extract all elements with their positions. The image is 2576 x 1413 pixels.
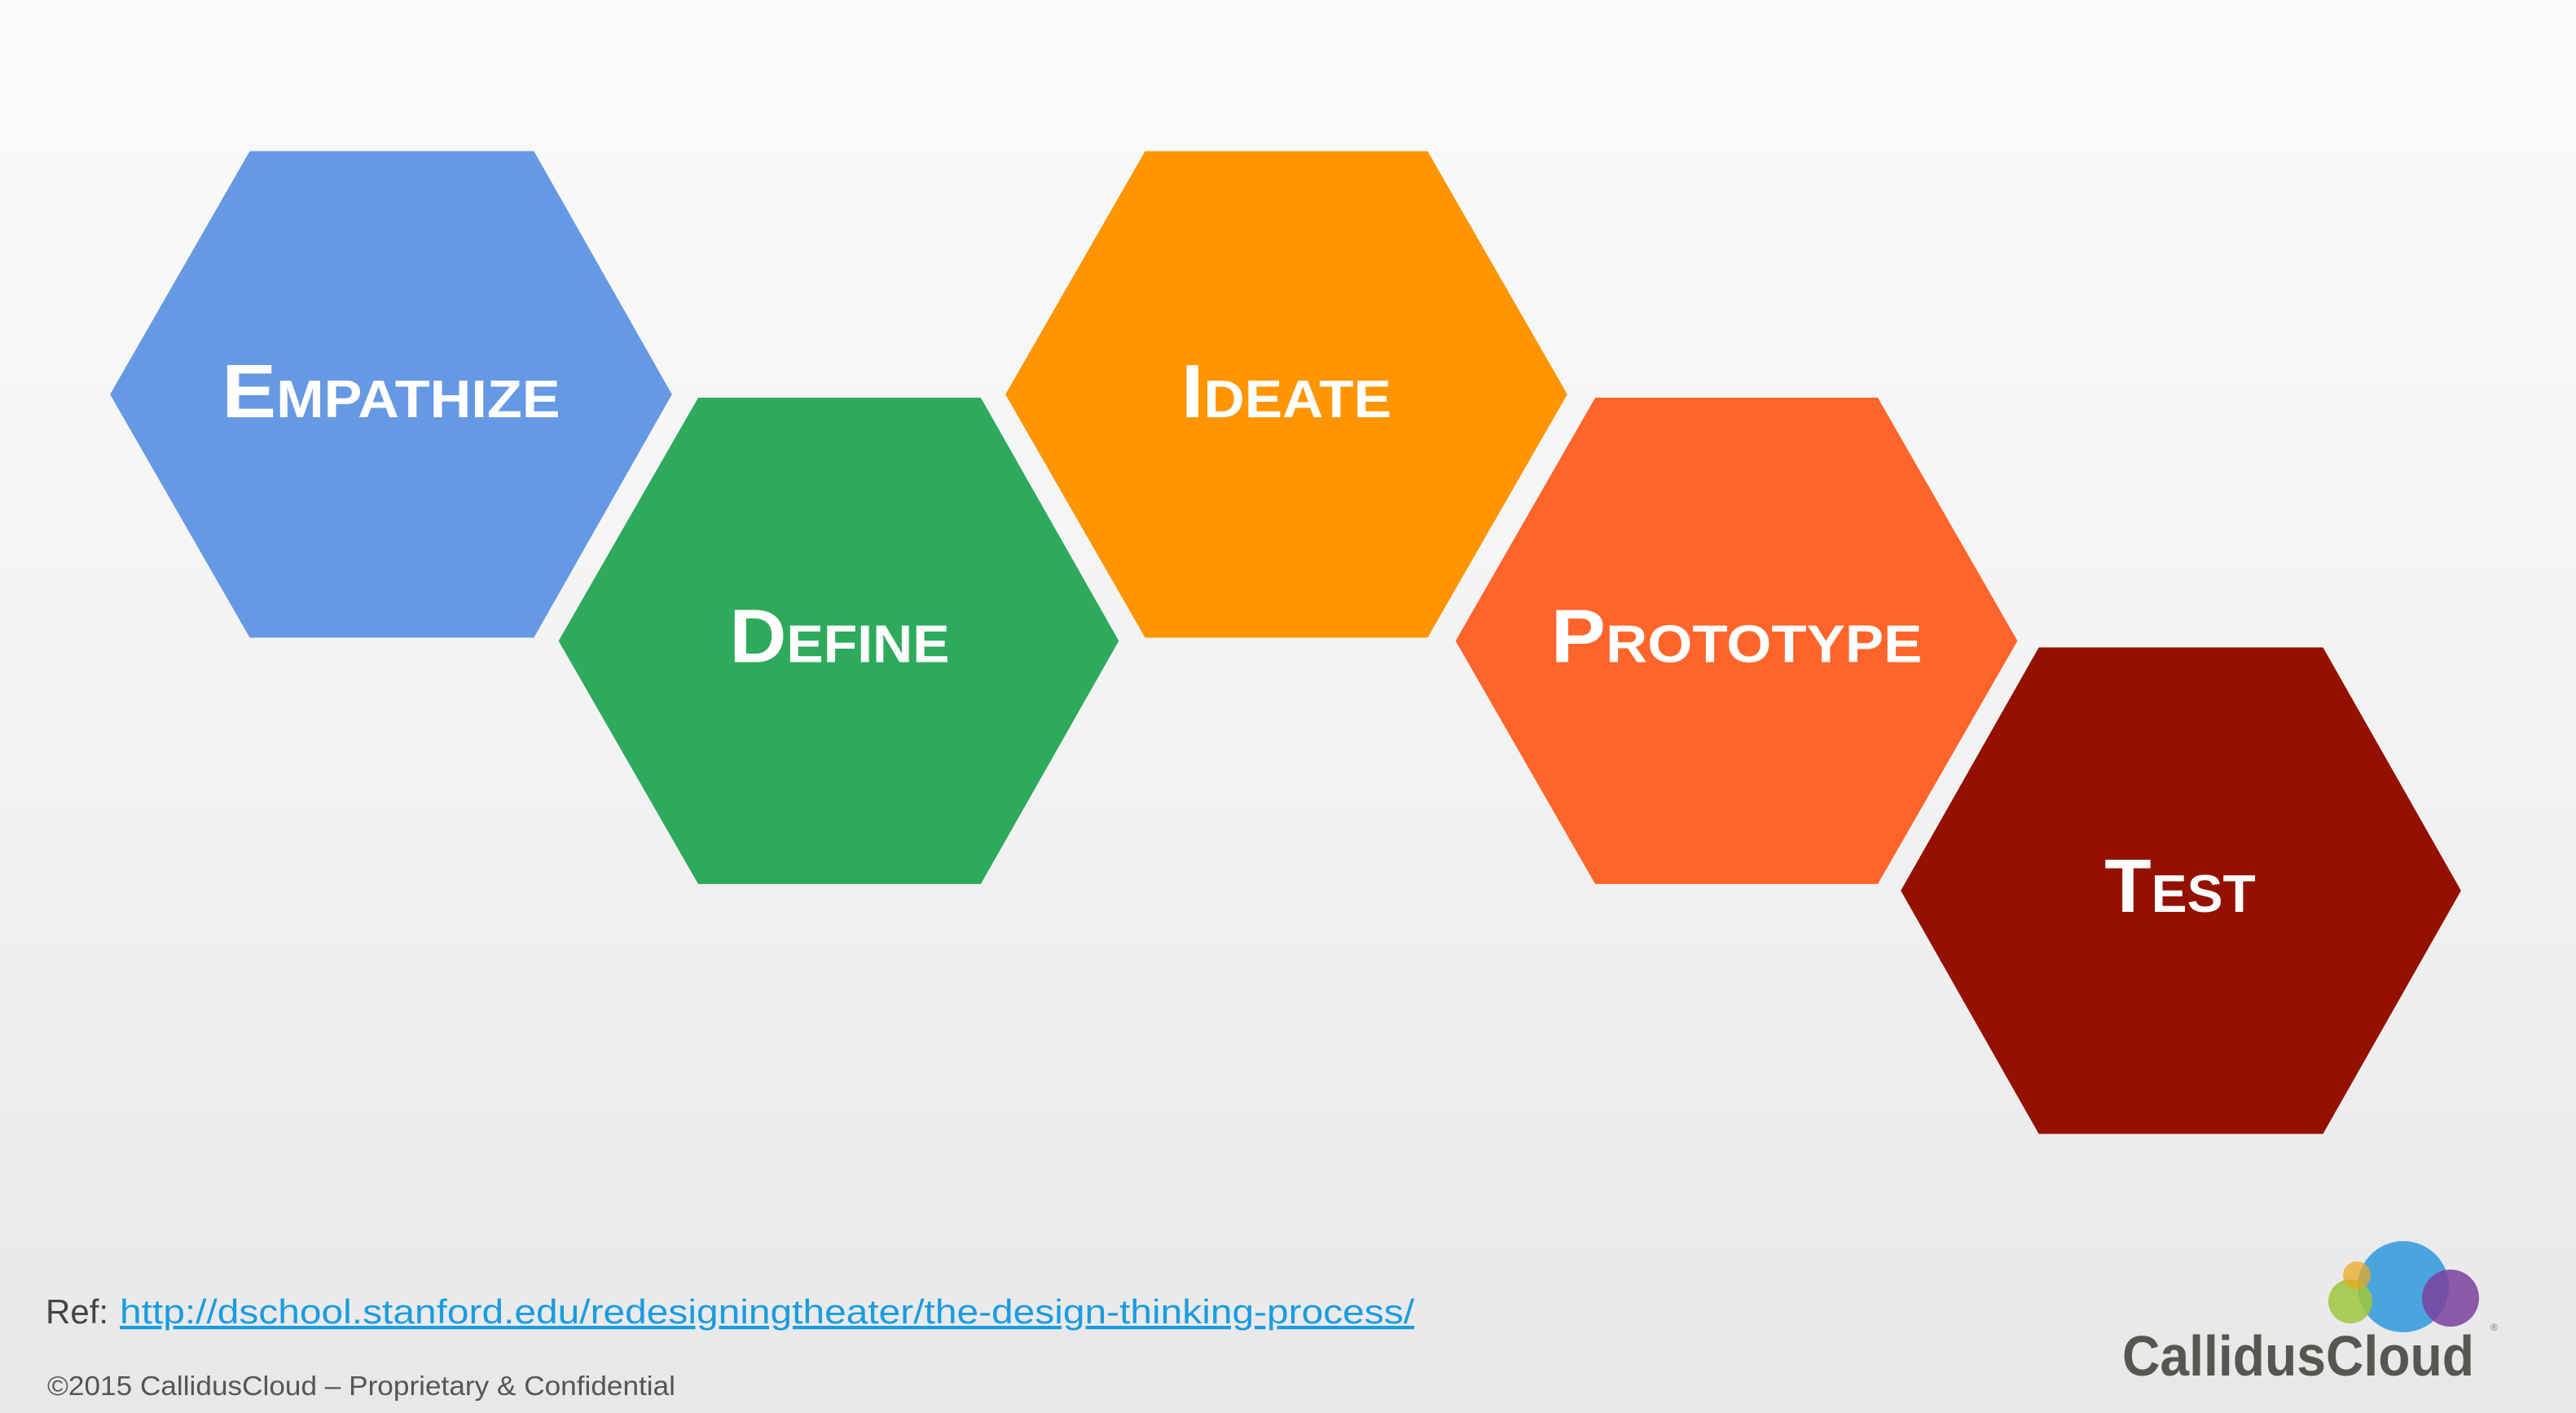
hexagon: Ideate — [1005, 152, 1567, 637]
hexagon: Prototype — [1456, 398, 2017, 884]
hexagon: Empathize — [110, 152, 672, 637]
logo: CallidusCloud: ® — [2490, 1322, 2498, 1333]
hexagon: Prototype: Prototype — [1551, 594, 1922, 679]
logo: CallidusCloud — [2122, 1241, 2498, 1388]
hexagon: Define: Define — [729, 594, 950, 679]
logo: CallidusCloud: CallidusCloud — [2122, 1324, 2474, 1388]
reference link: http://dschool.stanford.edu/redesigningtheater/the-design-thinking-process/ — [120, 1292, 1414, 1331]
hexagon: Test — [1901, 648, 2461, 1133]
reference link: Ref: — [46, 1292, 108, 1331]
hexagon: Define — [559, 398, 1119, 884]
hexagon: Empathize: Empathize — [222, 349, 560, 434]
copyright: ©2015 CallidusCloud – Proprietary & Confidential — [47, 1371, 675, 1401]
hexagon: Test: Test — [2104, 843, 2256, 928]
hexagon: Ideate: Ideate — [1181, 349, 1391, 434]
